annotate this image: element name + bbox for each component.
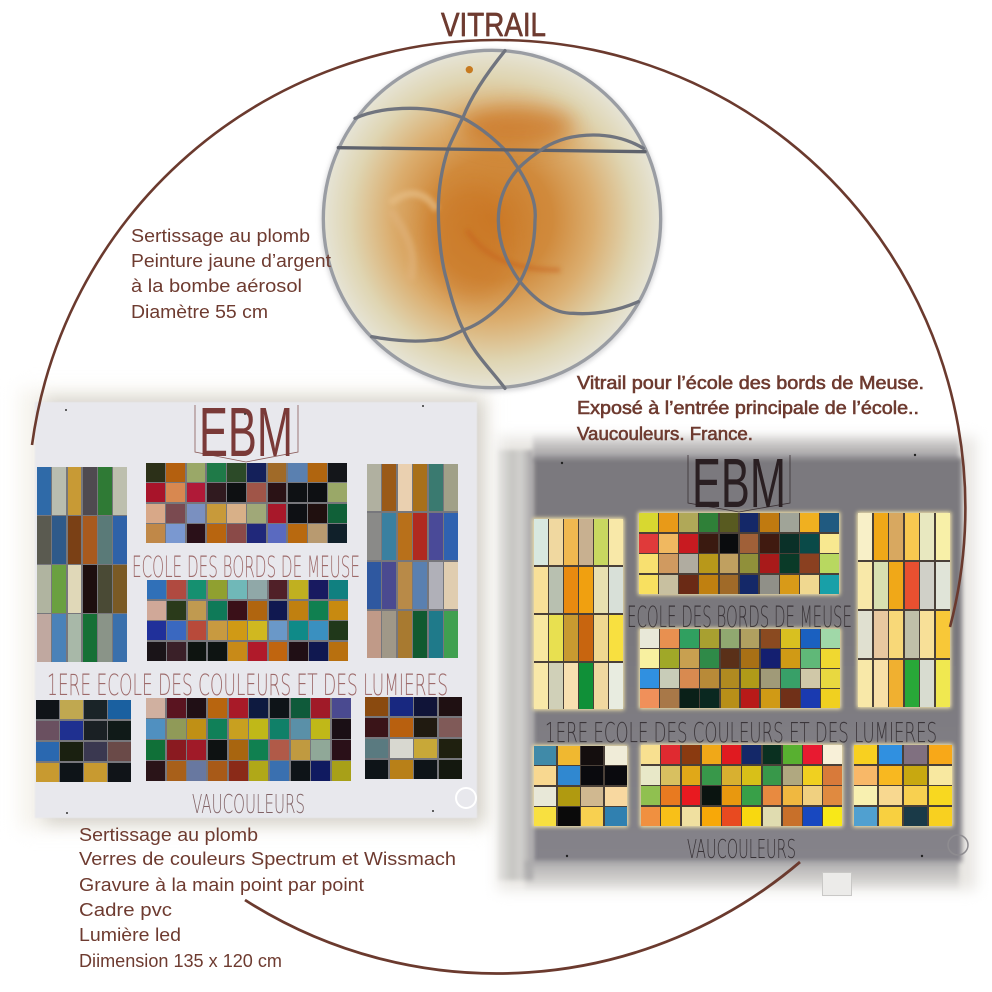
- text block: materials and dimensions: Gravure à la main point par point: [79, 875, 364, 895]
- text block: school window description: Vitrail pour l’école des bords de Meuse.: [577, 373, 924, 393]
- text block: school window description: Exposé à l’entrée principale de l’école..: [577, 398, 919, 418]
- engraved lettering: right panel: VAUCOULEURS: [687, 835, 796, 865]
- engraved lettering: left panel: VAUCOULEURS: [192, 790, 305, 820]
- engraved lettering: right panel: EBM: [692, 444, 786, 522]
- text block: materials and dimensions: [79, 825, 456, 971]
- engraved lettering: right panel: [545, 444, 969, 865]
- text block: materials and dimensions: Verres de couleurs Spectrum et Wissmach: [79, 849, 456, 869]
- round stained glass: yellow silver stain with lead lines: [319, 48, 665, 394]
- panel: right backlit stained glass photo: [494, 432, 980, 896]
- text block: round stained glass description: Sertissage au plomb: [131, 226, 310, 246]
- text block: materials and dimensions: Lumière led: [79, 925, 181, 945]
- panel: left stained glass photo: [18, 386, 494, 835]
- text block: school window description: [576, 373, 924, 444]
- text block: round stained glass description: Peinture jaune d’argent: [131, 251, 331, 271]
- text block: materials and dimensions: Diimension 135 x 120 cm: [79, 951, 282, 971]
- text block: round stained glass description: Diamètre 55 cm: [131, 302, 268, 322]
- text block: round stained glass description: à la bombe aérosol: [131, 276, 302, 296]
- circle outline: lower arc: [244, 861, 801, 975]
- text block: round stained glass description: [131, 226, 331, 322]
- engraved lettering: left panel: [47, 393, 477, 820]
- text block: materials and dimensions: Cadre pvc: [79, 900, 172, 920]
- text block: school window description: Vaucouleurs. France.: [577, 424, 753, 444]
- engraved lettering: left panel: EBM: [199, 393, 293, 471]
- text block: materials and dimensions: Sertissage au plomb: [79, 825, 258, 845]
